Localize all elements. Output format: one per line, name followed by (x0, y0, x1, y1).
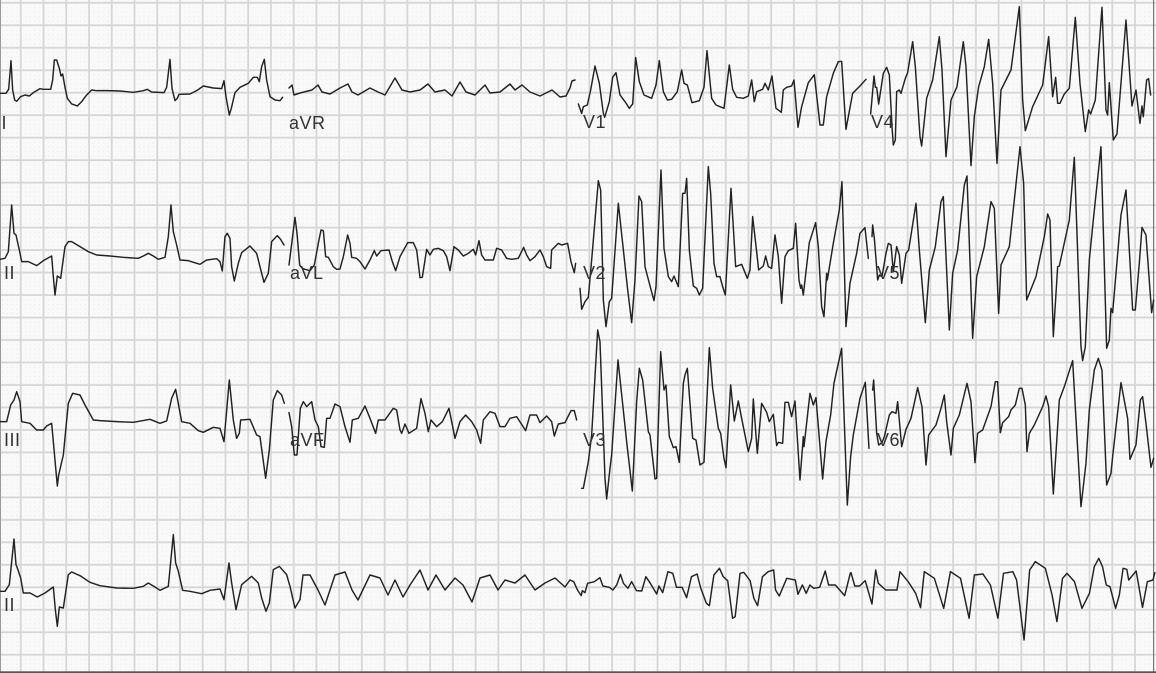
lead aVL (289, 217, 576, 283)
lead V3 (582, 330, 869, 505)
lead V2 (580, 167, 868, 327)
lead V5 (872, 147, 1154, 361)
lead V2 label: V2 (583, 263, 606, 283)
lead V6 (873, 358, 1154, 507)
lead aVL trace (289, 217, 576, 278)
lead V1 (578, 51, 866, 132)
lead III (0, 380, 284, 486)
lead V6 label: V6 (877, 430, 900, 450)
lead II trace (0, 205, 284, 295)
lead II (0, 205, 284, 295)
lead V6 trace (873, 358, 1154, 507)
left edge (0, 0, 1, 673)
lead III label: III (4, 430, 21, 450)
lead II label: II (4, 263, 15, 283)
lead V1 label: V1 (583, 112, 606, 132)
rhythm strip middle segment (300, 570, 570, 605)
rhythm strip left segment (0, 535, 300, 626)
lead aVF (289, 399, 577, 455)
lead I trace (0, 59, 283, 115)
lead V4 label: V4 (871, 112, 894, 132)
lead V4 (871, 7, 1151, 166)
lead aVR (289, 78, 575, 133)
lead aVF trace (289, 399, 577, 455)
lead aVF label: aVF (290, 430, 325, 450)
lead aVR trace (289, 78, 575, 97)
bottom edge (0, 671, 1156, 673)
lead I label: I (2, 113, 7, 133)
lead V2 trace (580, 167, 868, 327)
lead III trace (0, 380, 284, 486)
lead V5 trace (872, 147, 1154, 361)
lead V5 label: V5 (877, 263, 900, 283)
lead I (0, 59, 283, 133)
lead V3 trace (582, 330, 869, 505)
right edge (1153, 0, 1154, 673)
rhythm strip lead II (0, 535, 1155, 640)
rhythm strip label: II (4, 595, 15, 615)
lead V1 trace (578, 51, 866, 129)
lead V3 label: V3 (583, 430, 606, 450)
lead V4 trace (871, 7, 1151, 166)
lead aVR label: aVR (289, 113, 326, 133)
lead aVL label: aVL (290, 263, 324, 283)
rhythm strip right segment (570, 558, 1155, 640)
